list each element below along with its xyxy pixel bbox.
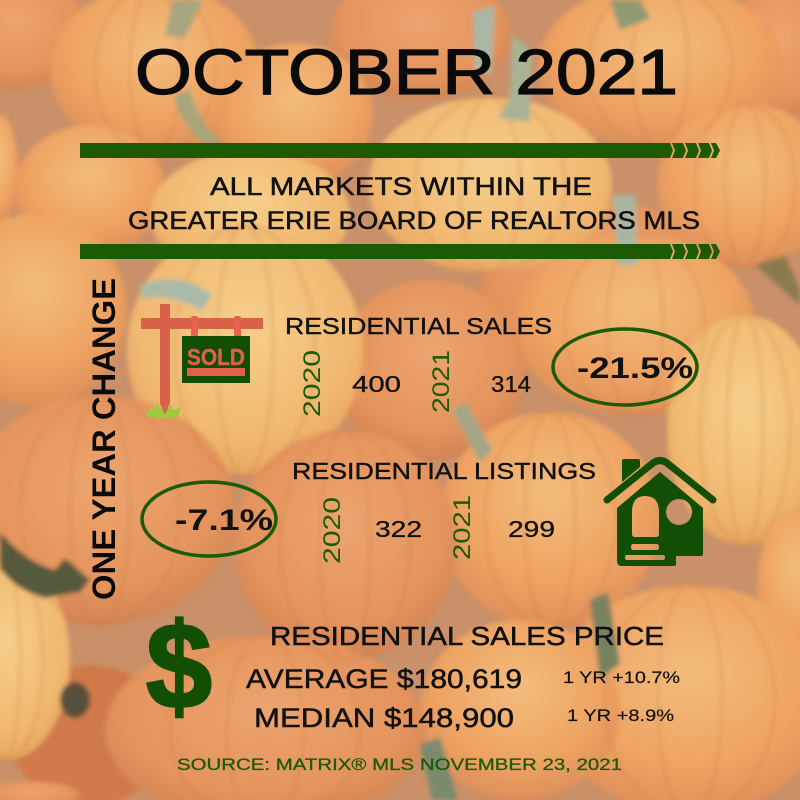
callout: listings change: -7.1%: [175, 504, 273, 537]
sales 2021 year label: 2021: [428, 350, 455, 413]
heading: residential sales price: RESIDENTIAL SALES PRICE: [270, 621, 664, 651]
source note: SOURCE: MATRIX® MLS NOVEMBER 23, 2021: [177, 755, 622, 774]
sales 2020 value: 400: [352, 371, 401, 397]
subtitle: GREATER ERIE BOARD OF REALTORS MLS: [128, 207, 700, 235]
icon: house: [607, 459, 713, 566]
stems: [165, 0, 203, 38]
sales 2020 year label: 2020: [299, 350, 326, 417]
callout: sales change: [553, 329, 697, 405]
icon: sold sign: SOLD: [187, 344, 245, 370]
median one year change: 1 YR +8.9%: [567, 706, 674, 725]
bottom arrow bar: [80, 244, 720, 259]
average price: AVERAGE $180,619: [246, 664, 522, 694]
subtitle: [128, 173, 700, 235]
title: OCTOBER 2021: [135, 36, 678, 108]
subtitle: ALL MARKETS WITHIN THE: [210, 173, 592, 201]
heading: residential sales: RESIDENTIAL SALES: [285, 313, 552, 339]
icon: sold sign: [141, 304, 263, 418]
heading: residential listings: RESIDENTIAL LISTINGS: [292, 458, 596, 484]
median price: MEDIAN $148,900: [254, 703, 514, 733]
listings 2021 value: 299: [508, 516, 555, 542]
average one year change: 1 YR +10.7%: [563, 668, 680, 687]
side label: one year change: ONE YEAR CHANGE: [86, 278, 122, 600]
top arrow bar: [80, 143, 720, 158]
sales 2021 value: 314: [491, 371, 531, 397]
listings 2021 year label: 2021: [449, 495, 476, 560]
callout: listings change: [142, 482, 276, 556]
callout: sales change: -21.5%: [577, 352, 693, 385]
icon: dollar sign: $: [146, 598, 212, 734]
listings 2020 year label: 2020: [319, 497, 346, 564]
listings 2020 value: 322: [375, 516, 422, 542]
